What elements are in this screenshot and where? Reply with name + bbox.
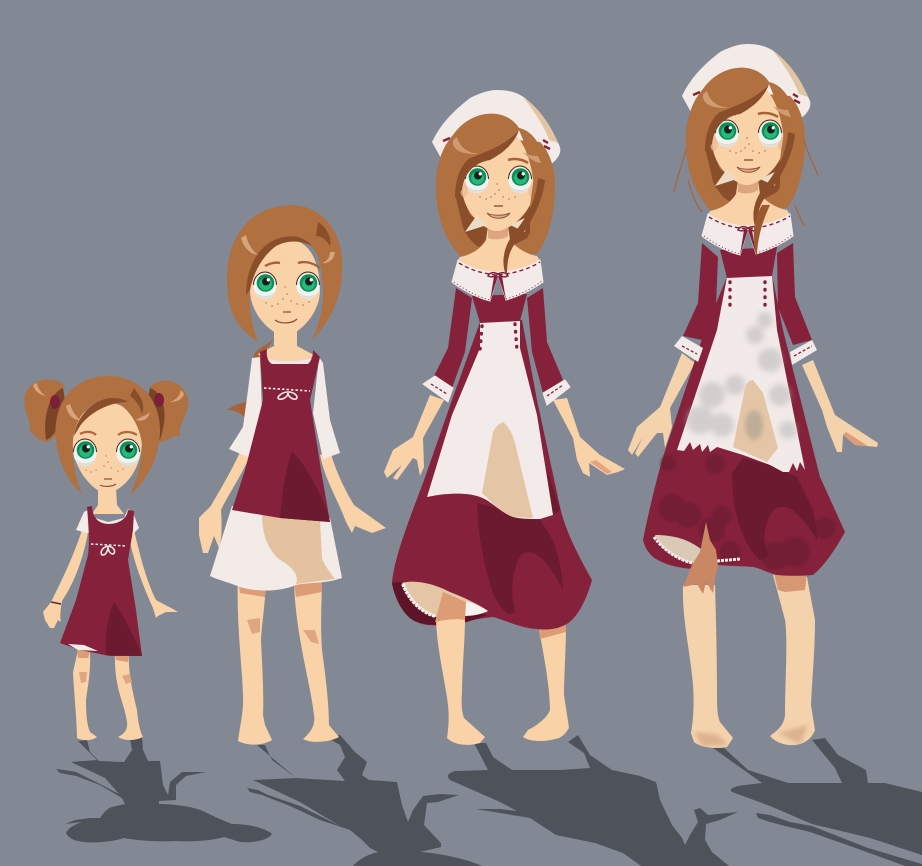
fringe highlight	[453, 137, 480, 154]
skirt fold	[262, 514, 335, 584]
right leg	[770, 575, 815, 745]
apron stain	[733, 380, 778, 462]
hair shadow	[74, 388, 143, 436]
knee marks	[247, 618, 319, 644]
collar stitches	[459, 262, 540, 275]
hair bun right	[146, 381, 188, 442]
pinafore	[232, 349, 330, 522]
figure: fourth child body	[628, 243, 878, 748]
fringe shadow	[455, 130, 519, 198]
legs	[73, 650, 97, 740]
freckles	[86, 456, 123, 472]
bun highlights	[33, 383, 184, 402]
sleeve left	[433, 288, 472, 388]
skirt side fold	[547, 470, 560, 515]
left arm and hand	[628, 353, 695, 457]
apron grime	[686, 312, 797, 439]
cheeks	[460, 183, 536, 197]
petticoat lace left	[403, 584, 435, 616]
bodice	[720, 247, 777, 278]
skirt	[643, 275, 845, 576]
hand shade	[843, 432, 868, 446]
left leg	[683, 585, 733, 748]
right leg	[523, 625, 569, 741]
right fringe highlight	[523, 152, 541, 163]
apron	[427, 320, 553, 519]
collar lace	[454, 281, 542, 300]
apron buttons	[480, 324, 517, 350]
collar	[452, 260, 543, 301]
bun shadows	[45, 388, 165, 440]
right arm	[320, 450, 386, 533]
skirt fold	[477, 503, 563, 614]
collar ribbon	[488, 273, 508, 277]
left leg	[436, 618, 485, 745]
freckles	[266, 287, 309, 306]
right foot grime	[778, 725, 808, 744]
fourth child stray hair	[674, 140, 818, 226]
face	[250, 240, 320, 335]
right arm and hand	[553, 398, 625, 477]
hair clips	[465, 215, 527, 232]
ponytail	[227, 338, 275, 418]
shadow: fourth child arm	[756, 813, 922, 866]
back hair	[436, 135, 555, 256]
leg shade	[77, 650, 129, 662]
neck and chest	[457, 226, 541, 274]
figure: fourth child head and collar	[682, 44, 810, 255]
neck shade	[488, 226, 508, 239]
sleeve right	[777, 243, 812, 345]
pinafore fold	[280, 452, 330, 522]
apron stain grime	[745, 410, 763, 440]
apron buttons	[730, 282, 765, 306]
face	[72, 403, 142, 493]
hair highlight	[241, 235, 335, 263]
sleeve right	[527, 288, 563, 393]
pinafore sash	[264, 388, 310, 399]
hair bun left	[24, 379, 66, 442]
right sleeve	[313, 357, 340, 459]
sleeve left	[683, 243, 718, 340]
fourth child long strand	[754, 205, 770, 258]
collar placket	[490, 276, 506, 301]
legs	[238, 575, 272, 745]
cuff left	[423, 376, 453, 402]
dress	[60, 506, 142, 656]
mouth	[487, 213, 510, 218]
hair highlights	[66, 404, 150, 421]
dress sash	[91, 544, 127, 555]
shadow: second child	[247, 735, 482, 866]
neck	[258, 330, 314, 368]
nose and mouth	[275, 312, 297, 323]
brows	[470, 159, 528, 165]
long strand	[503, 178, 545, 278]
petticoat hem	[392, 582, 487, 625]
bracelet	[51, 602, 61, 604]
dark hair near neck	[455, 188, 537, 247]
right leg wound	[773, 570, 807, 592]
kerchief shade	[523, 97, 558, 143]
shadow: fourth child	[713, 738, 922, 855]
apron fold	[482, 422, 533, 518]
sleeves	[229, 357, 262, 458]
skirt	[210, 506, 342, 591]
cuff right	[543, 380, 570, 405]
figure: third child head and collar	[432, 90, 560, 301]
eyes	[254, 272, 320, 299]
shadow under skirt	[238, 578, 322, 597]
hair shadow	[246, 222, 330, 295]
left arm and hand	[384, 395, 444, 480]
figure: small child	[24, 376, 188, 740]
left leg shade	[435, 592, 466, 622]
brows	[265, 262, 320, 268]
bodice	[472, 294, 527, 323]
left foot grime	[694, 732, 728, 746]
cuff right	[790, 340, 817, 365]
torn skirt wound	[683, 522, 718, 594]
right leg	[115, 653, 143, 740]
front hair	[227, 205, 342, 342]
white shirt	[76, 508, 139, 534]
hand shade	[590, 460, 612, 474]
neck	[92, 488, 124, 514]
eyes	[74, 439, 140, 466]
petticoat	[655, 535, 702, 565]
bun ribbon right	[154, 393, 164, 407]
dress fold	[105, 602, 142, 656]
cuff stitches	[431, 384, 563, 396]
right arm	[128, 530, 178, 618]
knee marks	[79, 672, 132, 684]
kerchief	[432, 90, 560, 167]
cuff left	[674, 336, 703, 362]
shadow: small child	[56, 737, 272, 842]
skirt	[392, 320, 592, 630]
petticoat lace	[654, 537, 740, 563]
face	[462, 129, 534, 231]
brows	[80, 432, 137, 435]
bun ribbons	[50, 395, 60, 409]
cuff stitches	[682, 346, 812, 356]
shirt collar	[267, 358, 312, 366]
petticoat	[402, 582, 488, 617]
nose and mouth	[100, 479, 116, 486]
figure: third child body	[384, 288, 625, 745]
skirt fold	[732, 458, 817, 560]
arms and hands	[199, 452, 250, 553]
right arm and hand	[802, 360, 878, 452]
kerchief ties	[443, 138, 550, 149]
arms and hands	[43, 530, 88, 628]
apron	[677, 275, 805, 472]
right leg	[294, 575, 339, 742]
right leg shade	[538, 622, 566, 639]
figure: second child	[199, 205, 386, 745]
eyes	[466, 166, 532, 193]
petticoat lace right	[464, 601, 488, 616]
front hair	[55, 376, 160, 495]
skirt stains	[658, 454, 836, 570]
front hair	[436, 114, 545, 240]
nose	[494, 205, 503, 207]
petticoat	[68, 644, 98, 651]
freckles	[480, 184, 515, 199]
shadow: third child	[448, 735, 738, 866]
